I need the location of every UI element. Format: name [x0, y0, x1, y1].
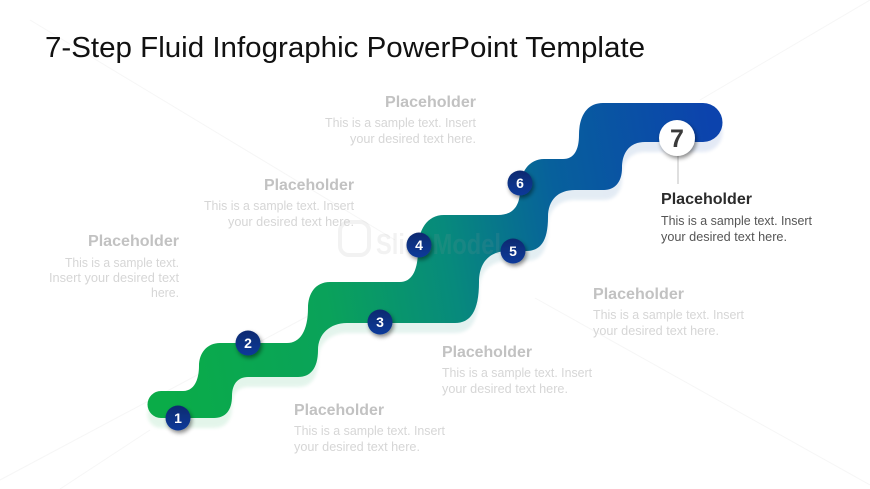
title: 7-Step Fluid Infographic PowerPoint Template — [45, 32, 645, 64]
text block: step 4: This is a sample text. Insert — [204, 198, 354, 213]
text block: step 3 — [442, 344, 592, 396]
step 7 badge — [659, 120, 695, 156]
text block: step 2: Insert your desired text — [49, 270, 179, 285]
watermark — [340, 222, 501, 261]
text block: step 6: This is a sample text. Insert — [325, 115, 476, 130]
text block: step 2: Placeholder — [88, 233, 179, 250]
step 2 badge — [236, 330, 260, 356]
text block: step 2 — [49, 233, 179, 300]
text block: step 2: here. — [151, 285, 179, 300]
text block: step 5: This is a sample text. Insert — [593, 307, 744, 322]
step 7 connector — [677, 156, 679, 184]
text block: step 7 — [661, 191, 812, 244]
fluid staircase shadow — [148, 113, 722, 428]
text block: step 4: your desired text here. — [228, 214, 354, 229]
text block: step 5 — [593, 286, 744, 338]
text block: step 4 — [204, 177, 354, 229]
text block: step 3: your desired text here. — [442, 381, 568, 396]
text block: step 7: This is a sample text. Insert — [661, 213, 812, 228]
text block: step 1: Placeholder — [294, 402, 384, 419]
text block: step 1 — [294, 402, 445, 454]
text block: step 3: Placeholder — [442, 344, 532, 361]
text block: step 1: This is a sample text. Insert — [294, 423, 445, 438]
text block: step 6: your desired text here. — [350, 131, 476, 146]
step 3 badge: 3 — [376, 314, 384, 330]
text block: step 5: your desired text here. — [593, 323, 719, 338]
text block: step 5: Placeholder — [593, 286, 684, 303]
step 5 badge: 5 — [509, 243, 517, 259]
step 5 badge — [500, 238, 526, 264]
text block: step 7: your desired text here. — [661, 229, 787, 244]
text block: step 7: Placeholder — [661, 191, 752, 208]
step 3 badge — [368, 310, 392, 334]
step 6 badge — [508, 170, 532, 196]
text block: step 1: your desired text here. — [294, 439, 420, 454]
text block: step 3: This is a sample text. Insert — [442, 365, 592, 380]
text block: step 2: This is a sample text. — [65, 255, 179, 270]
step 7 badge: 7 — [670, 125, 684, 153]
step 6 badge: 6 — [516, 175, 524, 191]
text block: step 6: Placeholder — [385, 94, 476, 111]
text block: step 6 — [325, 94, 476, 146]
step 4 badge: 4 — [415, 237, 423, 253]
watermark: SlideModel — [376, 229, 501, 261]
step 4 badge — [406, 232, 432, 258]
fluid staircase — [148, 103, 722, 418]
step 1 badge — [166, 406, 190, 430]
step 1 badge: 1 — [174, 410, 182, 426]
step 2 badge: 2 — [244, 335, 252, 351]
text block: step 4: Placeholder — [264, 177, 354, 194]
